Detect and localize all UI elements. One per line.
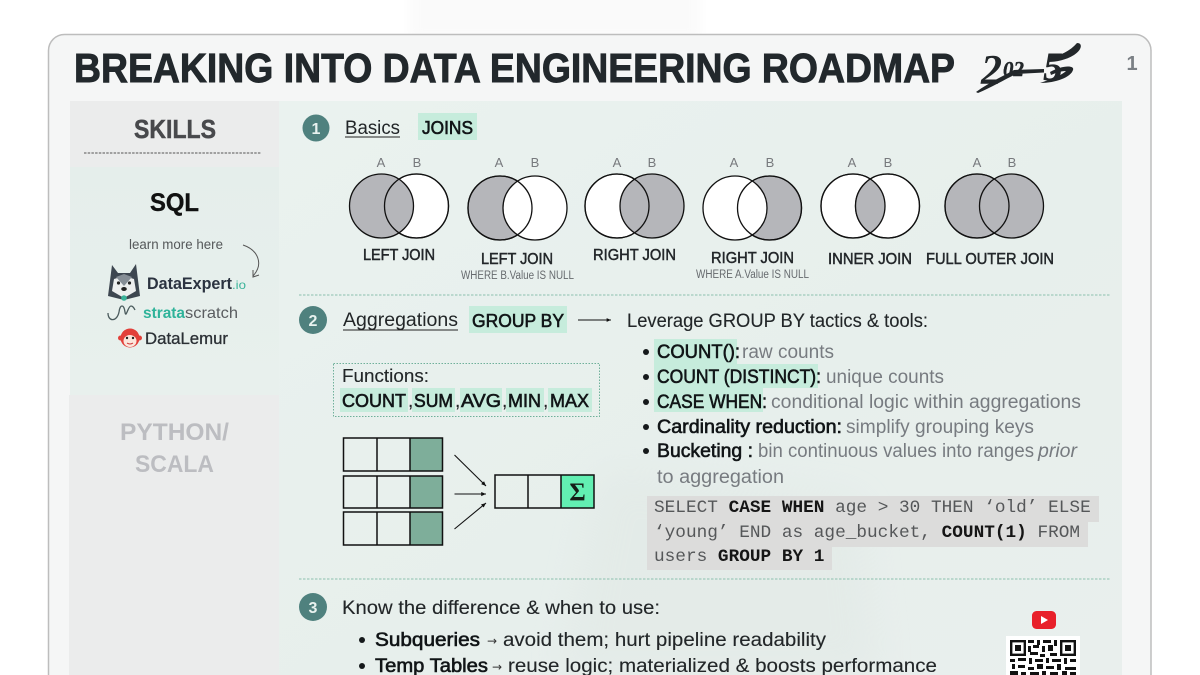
- tactics list: prior: [1037, 441, 1078, 462]
- venn: inner join: A: [848, 155, 857, 170]
- venn: right join: B: [648, 155, 656, 170]
- venn: inner join: INNER JOIN: [828, 251, 912, 268]
- venn: left join where null: LEFT JOIN: [481, 251, 553, 268]
- section 3: query structures: [299, 593, 1080, 675]
- code block: case when sql: ‘young’ END as age_bucket, COUNT(1) FROM: [654, 523, 1080, 543]
- logo text: DataLemur: DataLemur: [145, 330, 229, 348]
- arrow: curved to logos: [243, 245, 259, 277]
- code block: case when sql: users GROUP BY 1: [654, 547, 824, 567]
- venn: left join where null: WHERE B.Value IS NULL: [461, 270, 575, 282]
- venn: left join where null: A: [495, 155, 504, 170]
- page number: 1: [1126, 53, 1138, 75]
- callout: functions: MIN: [508, 391, 541, 411]
- heading: python/scala: PYTHON/: [120, 419, 229, 446]
- heading: basics: Basics: [345, 118, 400, 139]
- icon: husky logo: [108, 264, 140, 301]
- callout: functions: MAX: [550, 391, 589, 411]
- qr code: [1006, 636, 1080, 675]
- tactics list: [643, 339, 1081, 488]
- callout: functions: ,: [408, 391, 413, 412]
- year: 2025 handwritten: 5: [1043, 44, 1063, 89]
- venn: full outer join: A: [973, 155, 982, 170]
- venn: left join: [350, 155, 448, 264]
- logo text: DataExpert.io: .io: [232, 278, 246, 292]
- venn: left join where null: B: [531, 155, 539, 170]
- heading: know the difference: Know the difference & when to use:: [342, 598, 660, 619]
- badge 2: [299, 306, 327, 334]
- logo text: stratascratch: strata: [143, 305, 185, 322]
- tag: joins: [418, 113, 477, 140]
- arrow: to tactics: [578, 319, 611, 321]
- section 2: aggregations: [299, 306, 1099, 570]
- venn: right join: [585, 155, 684, 264]
- panel: main content: [279, 101, 1122, 675]
- callout: functions: Functions:: [342, 366, 429, 386]
- list: temp tables: →: [492, 660, 502, 674]
- venn: left join where null: [461, 155, 575, 282]
- list: subqueries: Subqueries: [375, 630, 480, 651]
- tactics list: COUNT():: [657, 342, 740, 363]
- venn: right join where null: RIGHT JOIN: [711, 250, 794, 267]
- heading: SQL: SQL: [150, 189, 199, 217]
- tactics list: Bucketing :: [657, 441, 753, 462]
- year: 2025 handwritten: 02: [1003, 57, 1024, 81]
- tactics list: CASE WHEN:: [657, 392, 767, 413]
- result row with sigma: [495, 475, 594, 508]
- arrows: rows to result: [454, 455, 486, 529]
- code block: case when sql: SELECT CASE WHEN age > 30 THEN ‘old’ ELSE: [654, 498, 1091, 518]
- heading: skills: SKILLS: [134, 114, 216, 144]
- badge 1: [302, 114, 330, 142]
- tag: group by: GROUP BY: [472, 311, 564, 331]
- list: subqueries: [359, 630, 827, 651]
- heading: python/scala: SCALA: [135, 451, 214, 478]
- tactics list: conditional logic within aggregations: [771, 392, 1081, 413]
- venn: right join where null: WHERE A.Value IS NULL: [696, 269, 810, 281]
- code block: case when sql: [647, 496, 1099, 570]
- callout: functions: SUM: [414, 391, 453, 411]
- panel: skills header: [70, 101, 279, 167]
- tag: joins: JOINS: [422, 118, 473, 138]
- title: BREAKING INTO DATA ENGINEERING ROADMAP: [74, 45, 955, 91]
- venn: full outer join: [926, 155, 1054, 268]
- list: subqueries: avoid them; hurt pipeline readability: [503, 630, 827, 651]
- logo text: stratascratch: scratch: [185, 305, 238, 322]
- panel: python/scala skill: [69, 395, 279, 675]
- venn: left join: B: [413, 155, 421, 170]
- heading: python/scala: [120, 419, 229, 478]
- callout: functions: AVG: [461, 391, 501, 411]
- venn: full outer join: B: [1008, 155, 1016, 170]
- text: leverage heading: Leverage GROUP BY tactics & tools:: [627, 311, 928, 332]
- tactics list: COUNT (DISTINCT):: [657, 367, 821, 388]
- badge 2: 2: [309, 313, 318, 330]
- icon: DataLemur monkey: [118, 328, 142, 348]
- icon: youtube: [1032, 611, 1056, 629]
- text: learn more here: learn more here: [129, 237, 223, 252]
- callout: functions: ,: [502, 391, 507, 412]
- year: 2025 handwritten: 2: [980, 48, 1002, 94]
- input rows: [344, 438, 442, 545]
- icon: stratascratch: [108, 306, 135, 320]
- tactics list: to aggregation: [657, 467, 784, 488]
- result row with sigma: Σ: [569, 479, 586, 506]
- venn: right join where null: [696, 155, 810, 281]
- tactics list: simplify grouping keys: [846, 417, 1034, 438]
- badge 3: 3: [309, 600, 318, 617]
- venn: full outer join: FULL OUTER JOIN: [926, 251, 1054, 268]
- venn: right join where null: A: [730, 155, 739, 170]
- list: temp tables: [359, 656, 937, 675]
- panel: SQL skill: [70, 167, 279, 395]
- logo text: DataExpert.io: DataExpert: [147, 275, 232, 293]
- list: subqueries: →: [487, 634, 497, 648]
- venn: right join where null: B: [766, 155, 774, 170]
- callout: functions: COUNT: [342, 391, 406, 411]
- badge 3: [299, 593, 327, 621]
- tactics list: Cardinality reduction:: [657, 417, 842, 438]
- diagram: group by aggregation: [344, 438, 594, 545]
- year: 2025 handwritten: [976, 43, 1081, 94]
- venn: right join: RIGHT JOIN: [593, 247, 676, 264]
- logo text: stratascratch: [143, 305, 238, 322]
- callout: functions: [334, 364, 600, 416]
- venn: right join: A: [613, 155, 622, 170]
- venn: inner join: [821, 155, 920, 268]
- tactics list: raw counts: [742, 342, 834, 363]
- heading: aggregations: Aggregations: [343, 310, 458, 331]
- venn: inner join: B: [884, 155, 892, 170]
- callout: functions: ,: [543, 391, 548, 412]
- venn: left join: A: [377, 155, 386, 170]
- venn: left join: LEFT JOIN: [363, 247, 435, 264]
- tactics list: unique counts: [826, 367, 944, 388]
- tactics list: bin continuous values into ranges: [758, 441, 1034, 462]
- callout: functions: ,: [455, 391, 460, 412]
- section 1: joins: [302, 113, 1054, 282]
- badge 1: 1: [312, 121, 321, 138]
